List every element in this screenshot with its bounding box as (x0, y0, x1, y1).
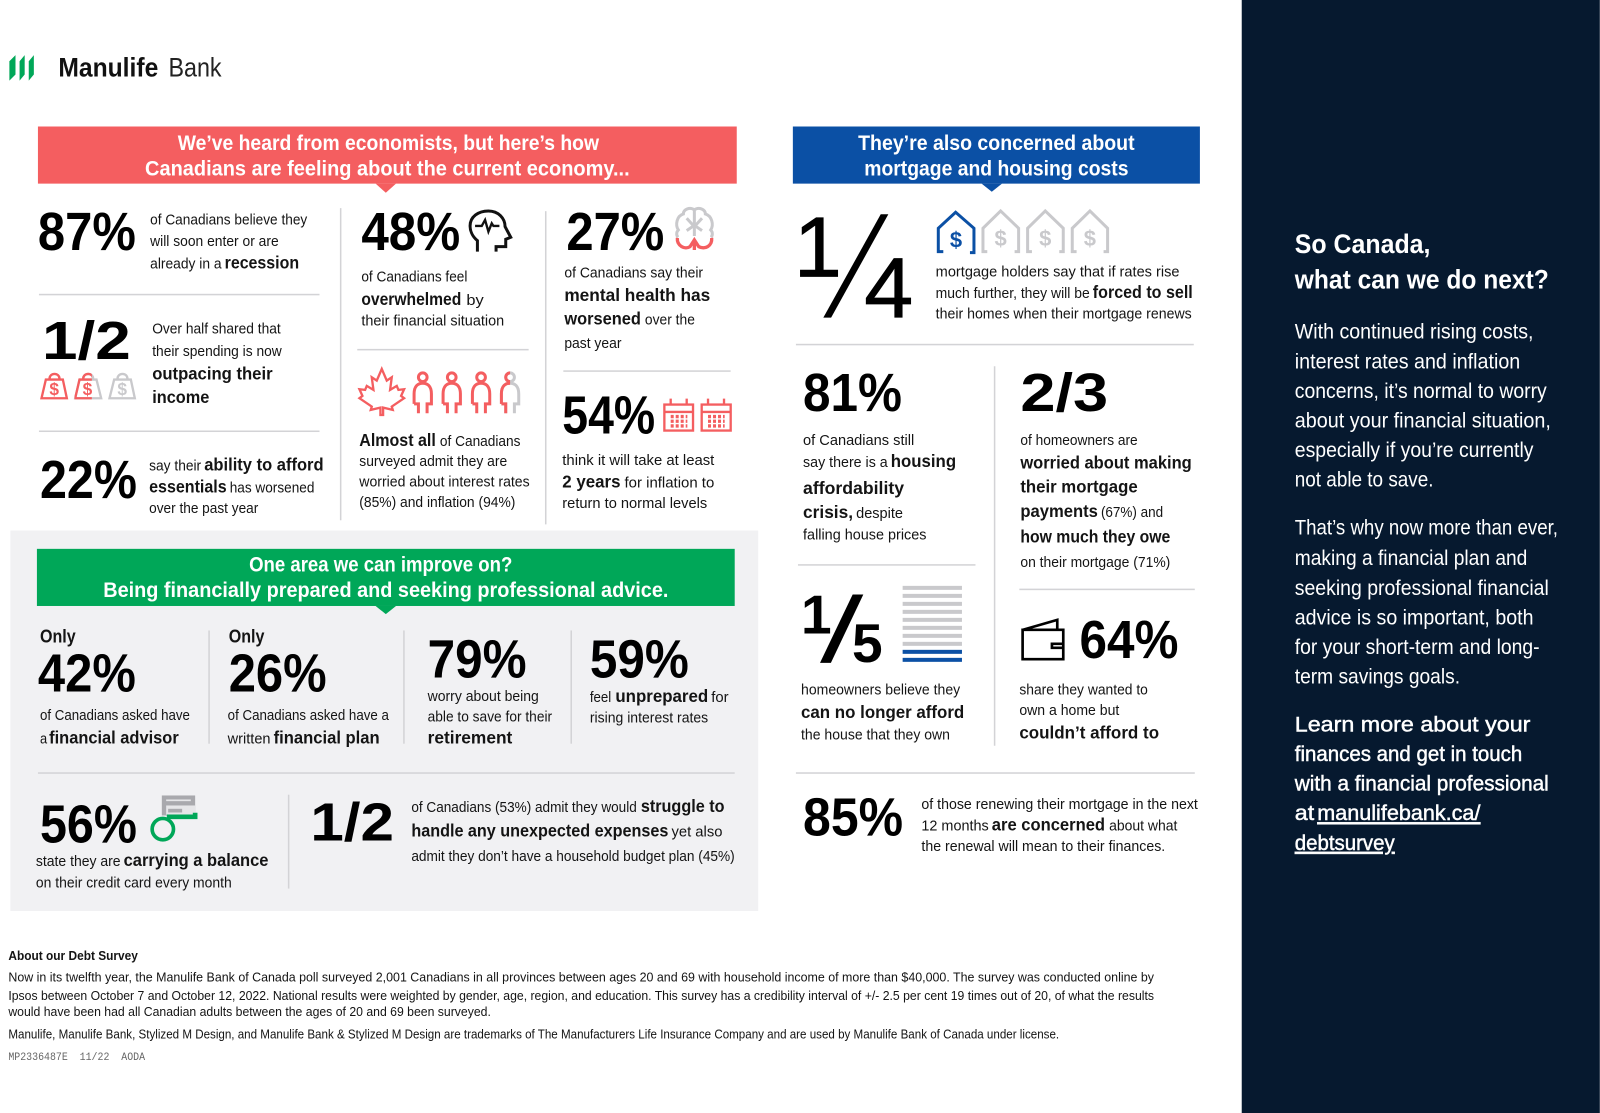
stat: 87% recession: will soon enter or are (149, 234, 279, 250)
stat: 81% housing affordability: despite (856, 506, 903, 522)
stat: 56% credit card balance: state they are (36, 854, 121, 870)
icon: houses with dollar signs: $ (950, 227, 962, 252)
sidebar paragraph: rising costs: about your financial situation, (1295, 408, 1551, 432)
icon: houses with dollar signs (938, 211, 1108, 253)
stat: 27% mental health: 27% (566, 202, 664, 262)
sidebar paragraph: rising costs: interest rates and inflation (1295, 349, 1520, 373)
stat: 81% housing affordability: of Canadians still (803, 433, 914, 449)
stat: 1/5 can no longer afford: can no longer afford (801, 702, 964, 722)
stat: 59% unprepared: 59% (590, 629, 689, 689)
sidebar paragraph: rising costs: With continued rising costs, (1295, 320, 1533, 344)
stat: 1/4 forced to sell: 1 (794, 199, 842, 295)
stat: 42% financial advisor: of Canadians asked have (40, 708, 190, 724)
stat: 26% financial plan: 26% (229, 644, 327, 704)
stat: 22% essentials: say their (149, 458, 201, 474)
stat: almost all worried: worried about interest rates (358, 475, 530, 491)
sidebar paragraph: rising costs: not able to save. (1295, 468, 1434, 492)
stat: 1/2 unexpected expenses: handle any unexpected expenses (411, 821, 668, 841)
stat: 1/2 spending: outpacing their (152, 364, 273, 384)
sidebar paragraph: rising costs (1295, 320, 1551, 492)
stat: almost all worried: of Canadians (440, 434, 520, 450)
stat: almost all worried: Almost all (359, 430, 436, 450)
stat: 56% credit card balance (36, 795, 269, 892)
heading banner: economy: Canadians are feeling about the current economy... (145, 156, 630, 180)
sidebar paragraph: financial plan (1295, 516, 1558, 689)
icon: houses with dollar signs: $ (1084, 226, 1096, 251)
stat: 42% financial advisor (38, 626, 190, 748)
icon: shopping bags: $ (83, 379, 93, 399)
stat: 81% housing affordability (803, 363, 956, 544)
footer: about the survey (7, 948, 1155, 1064)
stat: 27% mental health: mental health has (564, 285, 710, 305)
stat: 1/4 forced to sell: their homes when their mortgage renews (936, 306, 1192, 322)
footer: about the survey: MP2336487E 11/22 AODA (8, 1052, 146, 1064)
sidebar paragraph: financial plan: term savings goals. (1295, 665, 1460, 689)
logo: Manulife Bank (9, 53, 222, 83)
stat: 81% housing affordability: crisis, (803, 502, 853, 522)
panel: what can we do next (1242, 0, 1600, 1113)
sidebar paragraph: rising costs: concerns, it’s normal to worry (1295, 379, 1547, 403)
stat: 87% recession: already in a (150, 256, 222, 272)
stat: 2/3 mortgage payments: (67%) and (1101, 505, 1163, 521)
stat: 87% recession (38, 202, 308, 272)
sidebar heading: So Canada, (1295, 229, 1430, 259)
stat: 54% two years (562, 386, 731, 512)
stat: 42% financial advisor: 42% (38, 644, 136, 704)
stat: 54% two years: think it will take at least (562, 453, 714, 469)
icon: houses with dollar signs: $ (1039, 226, 1051, 251)
footer: about the survey: Manulife, Manulife Bank, Stylized M Design, and Manulife Bank & Stylized M Design are trademarks of The Manufacturers Life Insurance Company and are used by Manulife Bank of Canada under license. (8, 1027, 1059, 1042)
stat: 1/2 unexpected expenses: of Canadians (53%) admit they would (411, 800, 637, 816)
stat: 2/3 mortgage payments: 2/3 (1020, 363, 1108, 423)
stat: 2/3 mortgage payments (1019, 363, 1192, 571)
stat: 48% overwhelmed: their financial situation (361, 313, 504, 329)
stat: 54% two years: for inflation to (625, 476, 714, 492)
stat: 54% two years: return to normal levels (562, 496, 707, 512)
stat: 48% overwhelmed: by (466, 293, 484, 309)
footer: about the survey: About our Debt Survey (8, 948, 139, 963)
stat: 79% retirement (427, 629, 552, 748)
stat: 56% credit card balance: on their credit card every month (36, 876, 232, 892)
stat: 1/2 unexpected expenses: admit they don’t have a household budget plan (45%) (411, 849, 735, 865)
stat: 87% recession: of Canadians believe they (150, 212, 308, 228)
sidebar paragraph: financial plan: That’s why now more than ever, (1295, 516, 1558, 540)
stat: 64% couldn't afford: couldn’t afford to (1019, 723, 1159, 743)
stat: 59% unprepared: feel (590, 690, 611, 706)
stat: almost all worried: (85%) and inflation (94%) (359, 495, 515, 511)
stat: 48% overwhelmed: of Canadians feel (361, 270, 467, 286)
stat: 1/4 forced to sell (794, 189, 1193, 346)
stat: 1/5 can no longer afford: homeowners believe they (801, 683, 961, 699)
stat: 85% renewal concern: about what (1109, 818, 1177, 834)
stat: 85% renewal concern: are concerned (992, 814, 1105, 834)
stat: 79% retirement: retirement (428, 728, 513, 748)
stat: 56% credit card balance: 56% (40, 795, 137, 855)
heading banner: financially prepared: Being financially prepared and seeking professional advice. (103, 578, 668, 602)
footer: about the survey: Ipsos between October 7 and October 12, 2022. National results were weighted by gender, age, region, and education. This survey has a credibility interval of +/- 2.5 per cent 19 times out of 20, of what the results (8, 988, 1154, 1003)
stat: 85% renewal concern: the renewal will mean to their finances. (921, 839, 1165, 855)
footer: about the survey: Now in its twelfth year, the Manulife Bank of Canada poll surveyed 2,001 Canadians in all provinces between ages 20 and 69 with household income of more than $40,000. The survey was conducted online by (8, 969, 1155, 984)
heading banner: mortgage and housing: mortgage and housing costs (864, 156, 1129, 180)
stat: 27% mental health (563, 202, 712, 352)
logo: Manulife Bank: Manulife (58, 53, 158, 83)
panel: mortgage and housing costs (793, 127, 1200, 855)
logo: Manulife Bank: Bank (169, 53, 222, 83)
icon: shopping bags: $ (49, 379, 59, 399)
stat: 22% essentials: essentials (149, 477, 227, 497)
heading banner: economy (38, 127, 737, 193)
stat: 2/3 mortgage payments: of homeowners are (1020, 433, 1138, 449)
stat: 27% mental health: of Canadians say their (564, 265, 703, 281)
stat: 87% recession: recession (225, 252, 299, 272)
heading banner: mortgage and housing: They’re also concerned about (858, 131, 1135, 155)
stat: 54% two years: 54% (562, 386, 655, 446)
stat: almost all worried (358, 369, 530, 511)
stat: 64% couldn't afford: 64% (1080, 610, 1178, 670)
stat: 56% credit card balance: carrying a balance (124, 850, 269, 870)
stat: 85% renewal concern: 85% (803, 788, 903, 848)
stat: 48% overwhelmed: 48% (361, 202, 460, 262)
sidebar call to action: finances and get in touch (1295, 742, 1522, 766)
stat: 1/4 forced to sell: / (813, 189, 898, 346)
stat: 64% couldn't afford: own a home but (1019, 703, 1119, 719)
icon: green stripes (9, 55, 34, 81)
stat: 81% housing affordability: housing (891, 451, 956, 471)
stat: 42% financial advisor: a (40, 732, 48, 748)
stat: 79% retirement: worry about being (427, 689, 539, 705)
stat: 85% renewal concern (803, 788, 1198, 855)
stat: 27% mental health: past year (564, 336, 622, 352)
heading banner: economy: We’ve heard from economists, but here’s how (178, 131, 599, 155)
stat: 1/2 spending: income (152, 387, 210, 407)
stat: 26% financial plan: written (227, 732, 271, 748)
stat: 2/3 mortgage payments: worried about making (1019, 452, 1192, 472)
stat: 54% two years: 2 years (562, 472, 620, 492)
stat: 59% unprepared: rising interest rates (590, 710, 708, 726)
stat: 2/3 mortgage payments: how much they owe (1020, 527, 1171, 547)
stat: 1/2 spending: 1/2 (42, 311, 131, 371)
stat: 1/4 forced to sell: 4 (864, 240, 913, 336)
stat: 1/5 can no longer afford (801, 578, 964, 744)
stat: 22% essentials: over the past year (149, 501, 258, 517)
icon: wallet (1023, 620, 1063, 659)
stat: 22% essentials (40, 450, 324, 517)
panel: financial preparedness (10, 530, 758, 911)
stat: 79% retirement: able to save for their (428, 709, 552, 725)
panel: Canadians and the economy (38, 127, 737, 524)
icon: maple leaf (359, 369, 404, 415)
sidebar heading: what can we do next? (1294, 265, 1549, 295)
icon: people (414, 373, 519, 413)
sidebar paragraph: financial plan: making a financial plan and (1295, 546, 1527, 570)
stat: almost all worried: surveyed admit they are (359, 454, 507, 470)
sidebar call to action: with a financial professional (1294, 772, 1549, 796)
sidebar call to action: debtsurvey (1295, 831, 1395, 855)
stat: 42% financial advisor: financial advisor (49, 728, 179, 748)
sidebar call to action: Learn more about your (1295, 712, 1530, 736)
stat: 1/5 can no longer afford: 1 (801, 584, 832, 646)
stat: 1/2 spending: their spending is now (152, 344, 282, 360)
stat: 22% essentials: 22% (40, 450, 137, 510)
sidebar paragraph: financial plan: advice is so important, both (1295, 605, 1533, 629)
stat: 2/3 mortgage payments: their mortgage (1020, 477, 1138, 497)
stat: 1/2 spending: Over half shared that (152, 322, 281, 338)
stat: 81% housing affordability: falling house prices (803, 528, 927, 544)
stat: 1/2 unexpected expenses: struggle to (641, 796, 725, 816)
stat: 42% financial advisor: Only (40, 626, 76, 647)
sidebar paragraph: financial plan: seeking professional financial (1295, 576, 1549, 600)
sidebar call to action: at (1295, 801, 1314, 825)
stat: 26% financial plan: financial plan (274, 728, 380, 748)
stat: 64% couldn't afford (1019, 610, 1178, 743)
stat: 1/5 can no longer afford: the house that they own (801, 728, 950, 744)
stat: 85% renewal concern: 12 months (921, 818, 989, 834)
sidebar paragraph: rising costs: especially if you’re currently (1295, 438, 1534, 462)
stat: 2/3 mortgage payments: on their mortgage (71%) (1020, 555, 1170, 571)
stat: 1/4 forced to sell: mortgage holders say that if rates rise (936, 264, 1180, 280)
icon: shopping bags: $ (117, 379, 127, 399)
stat: 26% financial plan: of Canadians asked have a (228, 708, 390, 724)
sidebar call to action: manulifebank.ca/ (1317, 801, 1480, 825)
icon: document lines (903, 586, 962, 662)
icon: shopping bags (42, 374, 135, 399)
heading banner: financially prepared: One area we can improve on? (249, 552, 512, 576)
stat: 1/2 unexpected expenses (310, 793, 735, 865)
sidebar call to action (1294, 712, 1549, 855)
stat: 59% unprepared: for (711, 690, 729, 706)
stat: 22% essentials: ability to afford (204, 454, 324, 474)
stat: 1/2 unexpected expenses: 1/2 (310, 793, 394, 853)
stat: 81% housing affordability: affordability (803, 478, 904, 498)
stat: 26% financial plan (227, 626, 390, 748)
stat: 1/5 can no longer afford: 5 (852, 612, 883, 674)
stat: 2/3 mortgage payments: payments (1020, 501, 1098, 521)
stat: 48% overwhelmed: overwhelmed (361, 289, 461, 309)
stat: 22% essentials: has worsened (230, 481, 314, 497)
stat: 79% retirement: 79% (428, 629, 527, 689)
stat: 59% unprepared: unprepared (615, 686, 708, 706)
stat: 85% renewal concern: of those renewing their mortgage in the next (921, 797, 1198, 813)
stat: 87% recession: 87% (38, 202, 136, 262)
stat: 1/5 can no longer afford: / (814, 578, 869, 681)
stat: 64% couldn't afford: share they wanted to (1019, 683, 1148, 699)
heading banner: financially prepared (37, 549, 735, 614)
sidebar heading (1294, 229, 1549, 295)
heading banner: mortgage and housing (793, 127, 1200, 192)
stat: 59% unprepared (590, 629, 729, 726)
stat: 48% overwhelmed (361, 202, 511, 329)
icon: houses with dollar signs: $ (994, 226, 1007, 251)
stat: 27% mental health: over the (645, 312, 695, 328)
stat: 1/4 forced to sell: much further, they will be (936, 286, 1090, 302)
sidebar paragraph: financial plan: for your short-term and long- (1295, 635, 1540, 659)
stat: 1/4 forced to sell: forced to sell (1093, 282, 1193, 302)
icon: head with pulse (470, 211, 511, 252)
stat: 27% mental health: worsened (563, 308, 641, 328)
icon: brain (677, 208, 712, 250)
icon: credit card and ring (152, 795, 195, 840)
stat: 26% financial plan: Only (229, 626, 265, 647)
stat: 81% housing affordability: say there is a (803, 455, 888, 471)
stat: 1/2 unexpected expenses: yet also (671, 825, 722, 841)
stat: 1/2 spending (40, 320, 282, 403)
icon: calendars (664, 399, 731, 431)
footer: about the survey: would have been had all Canadian adults between the ages of 20 and 69 been surveyed. (7, 1004, 491, 1019)
stat: 81% housing affordability: 81% (803, 363, 902, 423)
